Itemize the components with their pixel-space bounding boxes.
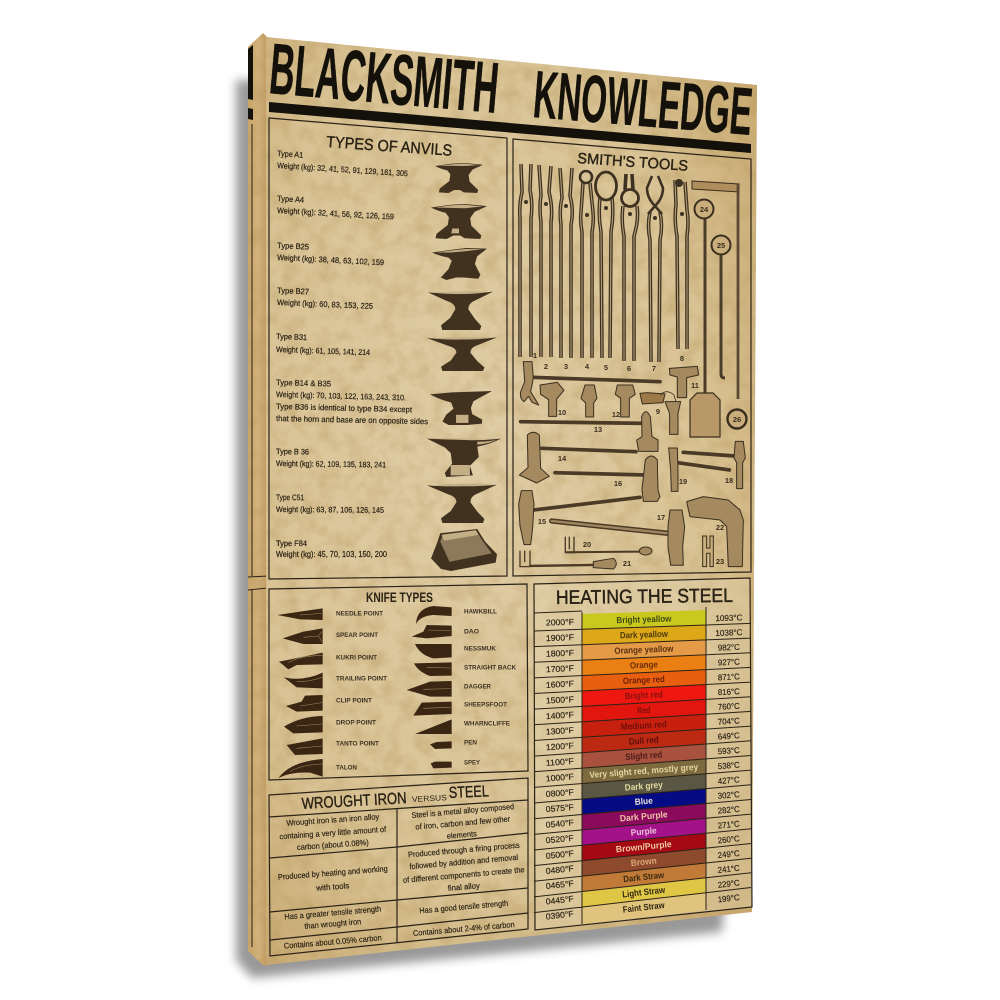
knife labels: CLIP POINT: [336, 698, 372, 704]
comparison text: wrought iron: Wrought iron is an iron alloy: [286, 812, 380, 828]
celsius column: 871°C: [718, 671, 740, 682]
fahrenheit column: 0500°F: [545, 848, 574, 861]
tool numbers: 12: [612, 410, 620, 419]
celsius column: 260°C: [717, 833, 740, 845]
comparison text: steel: final alloy: [447, 881, 480, 893]
heading: knife types: KNIFE TYPES: [366, 589, 433, 605]
panel: smith's tools: [513, 139, 751, 576]
text: BLACKSMITH: [267, 29, 502, 129]
fahrenheit column: 1200°F: [546, 740, 574, 752]
celsius column: 241°C: [717, 863, 740, 875]
colour bands: [582, 610, 706, 924]
tool numbers: 22: [716, 523, 724, 532]
comparison text: wrought iron: than wrought iron: [304, 917, 362, 931]
knife labels: HAWKBILL: [464, 608, 497, 616]
tool numbers: 10: [558, 408, 566, 417]
colour names: Slight red: [625, 750, 663, 762]
comparison text: wrought iron: with tools: [315, 881, 350, 893]
tong numbers: [533, 351, 684, 373]
tool numbers: 23: [716, 557, 724, 566]
canvas drop shadow: [236, 80, 725, 978]
knife labels: TALON: [336, 764, 357, 772]
anvil entry: B34 and B35: Type B14 & B35: [276, 378, 332, 389]
fahrenheit column: 0575°F: [545, 802, 574, 814]
heading: wrought iron versus steel: WROUGHT IRON: [301, 790, 407, 813]
knife labels: [336, 608, 516, 772]
colour names: Bright red: [625, 689, 663, 701]
anvil entry: B31: Type B31: [276, 332, 308, 342]
rods 24, 25, 26 and shovel: 24: [700, 205, 709, 214]
anvil entry: A1: Weight (kg): 32, 41, 52, 91, 129, 161, 305: [277, 161, 409, 178]
knife labels: NEEDLE POINT: [336, 610, 383, 618]
colour names: Blue: [634, 795, 653, 807]
canvas front face: [266, 37, 757, 965]
colour names: Purple: [630, 825, 657, 838]
tong numbers: 8: [680, 354, 684, 363]
tool numbers: 17: [657, 513, 665, 522]
anvil entry: B36: Weight (kg): 62, 109, 135, 183, 241: [276, 459, 387, 470]
anvil entry: F84: Weight (kg): 45, 70, 103, 150, 200: [276, 550, 387, 559]
tool numbers: 15: [538, 517, 546, 526]
knife labels: TANTO POINT: [336, 740, 379, 748]
fahrenheit column: 0390°F: [545, 908, 574, 922]
fahrenheit column: 1000°F: [545, 771, 574, 783]
colour names: Dark grey: [624, 780, 663, 793]
comparison text: steel: Has a good tensile strength: [419, 899, 509, 915]
comparison text: steel: Contains about 2-4% of carbon: [413, 920, 515, 938]
anvil entry: C51: Type C51: [276, 493, 305, 502]
knife labels: WHARNCLIFFE: [464, 720, 511, 728]
tong numbers: 3: [564, 362, 568, 371]
fahrenheit column: 0520°F: [545, 833, 574, 845]
fahrenheit column: 1300°F: [546, 725, 574, 737]
colour names: Very slight red, mostly grey: [589, 762, 698, 780]
tool numbers: 18: [725, 476, 733, 485]
fahrenheit column: 0465°F: [545, 878, 574, 891]
fahrenheit column: 2000°F: [546, 617, 574, 628]
anvil entry: B27: Type B27: [277, 286, 310, 296]
anvil entry: B34 and B35: Type B36 is identical to type B34 except: [276, 402, 413, 414]
knife labels: SPEAR POINT: [336, 632, 378, 639]
fahrenheit column: 0800°F: [545, 787, 574, 799]
knife labels: SHEEPSFOOT: [464, 702, 507, 708]
knife labels: NESSMUK: [464, 646, 496, 652]
knife labels: TRAILING POINT: [336, 676, 387, 682]
anvil entry: B25: [277, 241, 487, 280]
colour names: Dark Purple: [619, 809, 668, 824]
colour names: Brown/Purple: [615, 839, 672, 854]
colour names: Orange: [630, 659, 658, 671]
knife blades left column: [277, 608, 323, 778]
knife labels: DAGGER: [464, 684, 491, 690]
canvas side edge: [248, 33, 268, 966]
celsius column: 704°C: [718, 715, 740, 727]
panel: types of anvils: [269, 118, 507, 579]
comparison text: wrought iron: Has a greater tensile strength: [284, 904, 381, 922]
knife labels: STRAIGHT BACK: [464, 664, 516, 672]
anvil entry: A4: Type A4: [277, 194, 305, 205]
colour names: Medium red: [621, 719, 667, 732]
comparison text: wrought iron: [278, 812, 388, 951]
fahrenheit column: 1800°F: [546, 648, 574, 659]
comparison text: wrought iron: containing a very little amount of: [279, 825, 387, 841]
colour names: Orange yeallow: [614, 644, 674, 656]
fahrenheit column: [545, 617, 574, 922]
fahrenheit column: 1100°F: [545, 756, 574, 768]
fahrenheit column: 1900°F: [546, 632, 574, 643]
tool numbers: 11: [691, 381, 699, 390]
celsius column: 249°C: [717, 848, 740, 860]
colour names: Dark Straw: [623, 870, 665, 884]
anvil entry: A1: [277, 149, 483, 193]
celsius column: 538°C: [717, 760, 740, 771]
colour names: Red: [637, 705, 651, 716]
anvil entry: C51: [276, 484, 497, 523]
tool numbers: 13: [594, 425, 602, 434]
hammers, swages and bench tools: [519, 362, 745, 569]
tongs 1 to 8: [520, 164, 688, 362]
panel: knife types: [269, 584, 528, 780]
table rules: [534, 607, 751, 924]
anvil entry: B36: [276, 438, 501, 477]
fahrenheit column: 1700°F: [546, 663, 574, 674]
tool numbers: 14: [558, 454, 567, 463]
celsius column: 593°C: [717, 745, 740, 756]
celsius column: 982°C: [718, 642, 740, 653]
celsius column: 302°C: [717, 789, 740, 801]
anvil entry: B27: Weight (kg): 60, 83, 153, 225: [277, 298, 374, 311]
anvil entry: F84: Type F84: [276, 539, 308, 548]
knife labels: SPEY: [464, 760, 481, 766]
heading: smith's tools: SMITH'S TOOLS: [577, 150, 689, 175]
tong numbers: 6: [627, 364, 631, 373]
anvil entry: B31: Weight (kg): 61, 105, 141, 214: [276, 345, 371, 357]
celsius column: 1038°C: [715, 627, 743, 638]
title: Knowledge: KNOWLEDGE: [531, 57, 755, 150]
anvil entry: B34 and B35: [276, 378, 492, 426]
tool numbers: [538, 381, 733, 568]
fahrenheit column: 0445°F: [545, 893, 574, 907]
rods 24, 25, 26 and shovel: 25: [717, 241, 725, 250]
anvil entry: B27: [277, 286, 493, 330]
tong numbers: 2: [544, 362, 548, 371]
tool numbers: 21: [623, 559, 631, 568]
anvil entry: A4: [277, 194, 487, 239]
heading: types of anvils: TYPES OF ANVILS: [326, 134, 453, 160]
panel: heating the steel: [534, 578, 752, 930]
comparison text: steel: elements: [446, 829, 477, 841]
comparison text: steel: Steel is a metal alloy composed: [411, 802, 514, 820]
tong numbers: 1: [533, 351, 537, 360]
anvil entry: B31: [276, 332, 497, 371]
celsius column: 649°C: [717, 730, 740, 742]
knife labels: DAO: [464, 628, 479, 636]
comparison text: steel: of different components to create the: [403, 865, 525, 885]
comparison text: steel: [403, 802, 525, 938]
colour names: Brown: [630, 856, 657, 868]
celsius column: 199°C: [717, 892, 740, 905]
colour names: Bright yeallow: [616, 614, 672, 625]
tong numbers: 4: [585, 362, 590, 371]
colour names: [589, 614, 698, 915]
anvil entry: F84: [276, 529, 497, 571]
tong numbers: 5: [604, 363, 608, 372]
comparison text: steel: of iron, carbon and few other: [415, 814, 511, 832]
celsius column: 427°C: [717, 774, 740, 786]
celsius column: [715, 612, 743, 905]
celsius column: 1093°C: [715, 612, 743, 623]
celsius column: 760°C: [718, 701, 740, 712]
anvil entry: A4: Weight (kg): 32, 41, 56, 92, 126, 159: [277, 206, 395, 222]
anvil entry: A1: Type A1: [277, 149, 304, 160]
celsius column: 229°C: [717, 877, 740, 890]
fahrenheit column: 1600°F: [546, 679, 574, 690]
fahrenheit column: 0540°F: [545, 817, 574, 830]
tool numbers: 16: [614, 479, 622, 488]
rods 24, 25, 26 and shovel: 26: [733, 415, 741, 424]
tong numbers: 7: [652, 364, 656, 373]
tool numbers: 20: [583, 540, 591, 549]
heading: heating the steel: HEATING THE STEEL: [556, 585, 733, 609]
anvil entry: B34 and B35: that the horn and base are on opposite sides: [276, 414, 428, 426]
heading: wrought iron versus steel: VERSUS: [412, 793, 447, 804]
celsius column: 271°C: [717, 819, 740, 831]
anvil entry: B36: Type B 36: [276, 447, 310, 457]
celsius column: 282°C: [717, 804, 740, 816]
knife labels: KUKRI POINT: [336, 654, 377, 662]
colour names: Faint Straw: [622, 900, 666, 915]
rods 24, 25, 26 and shovel: [690, 181, 746, 437]
heading: wrought iron versus steel: STEEL: [448, 783, 489, 802]
fahrenheit column: 1400°F: [546, 710, 574, 721]
anvil entry: B34 and B35: Weight (kg): 70, 103, 122, 163, 243, 310.: [276, 390, 406, 402]
knife labels: DROP POINT: [336, 720, 376, 726]
colour names: Orange red: [623, 674, 665, 686]
colour names: Light Straw: [622, 885, 666, 899]
comparison text: steel: followed by addition and removal: [409, 853, 519, 871]
celsius column: 816°C: [718, 686, 740, 697]
fahrenheit column: 1500°F: [546, 694, 574, 706]
colour names: Dull red: [629, 735, 659, 747]
knife labels: PEN: [464, 740, 477, 746]
comparison text: wrought iron: Contains about 0.05% carbon: [284, 933, 382, 951]
comparison text: wrought iron: Produced by heating and working: [278, 864, 388, 882]
comparison text: wrought iron: carbon (about 0.08%): [297, 838, 369, 852]
heading: wrought iron versus steel: [301, 783, 489, 813]
knife blades right column: [407, 606, 452, 768]
celsius column: 927°C: [718, 657, 740, 667]
anvil entry: B25: Weight (kg): 38, 48, 63, 102, 159: [277, 253, 385, 267]
tool numbers: 19: [679, 477, 687, 486]
anvil entry: B25: Type B25: [277, 241, 310, 252]
panel: wrought iron versus steel: [269, 778, 528, 956]
comparison text: steel: Produced through a firing process: [408, 841, 520, 859]
tool numbers: 9: [656, 407, 660, 416]
colour names: Dark yeallow: [620, 629, 669, 640]
fahrenheit column: 0480°F: [545, 863, 574, 876]
anvil entry: C51: Weight (kg): 63, 87, 106, 126, 145: [276, 505, 385, 515]
